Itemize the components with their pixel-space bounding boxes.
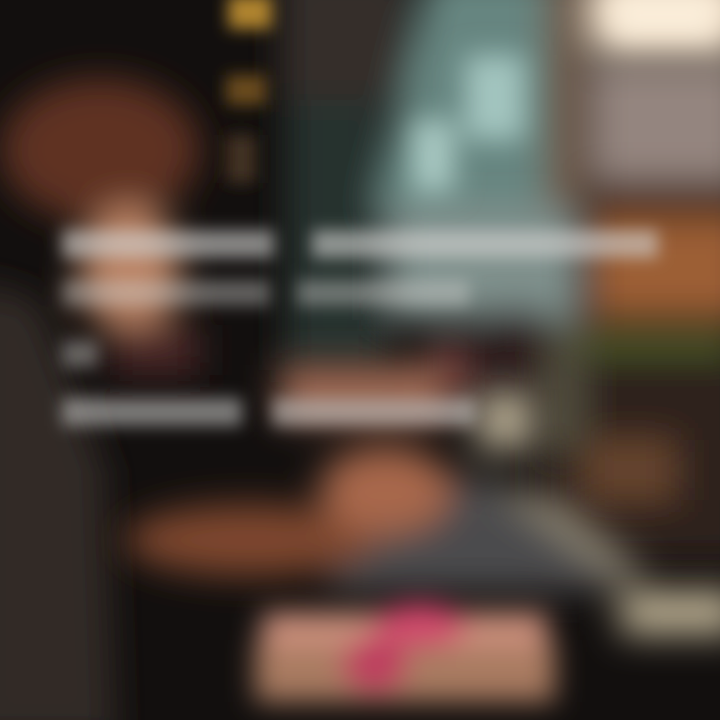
person: hair, face and sweater — [0, 78, 200, 720]
gift box with pink ribbon — [255, 603, 555, 702]
laptop, table and hands — [125, 365, 720, 635]
background lights — [226, 0, 272, 183]
background scene: window, wall and pillar — [280, 0, 720, 560]
heading text (illegible in blurred reference) — [62, 230, 658, 426]
heading line 4 — [62, 398, 476, 426]
background window highlights — [412, 0, 720, 192]
heading line 3 — [62, 341, 98, 367]
heading line 2 — [62, 280, 469, 306]
heading line 1 — [62, 230, 658, 258]
